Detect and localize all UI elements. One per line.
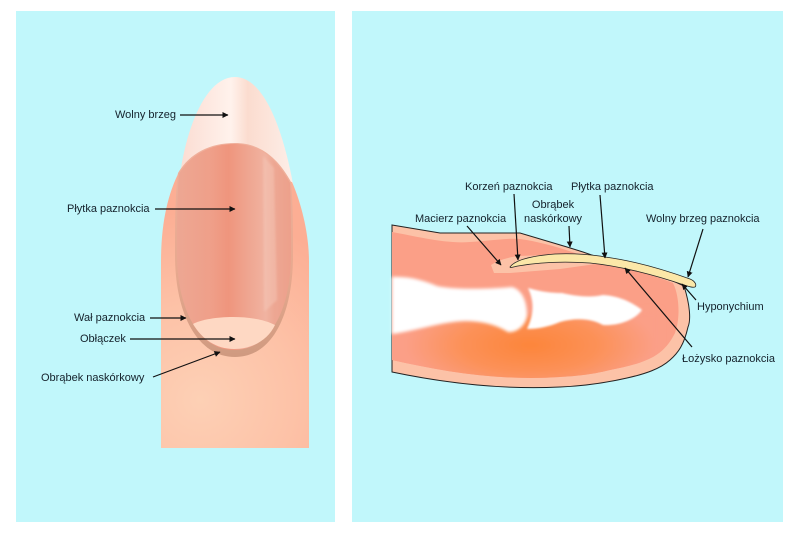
label: Wał paznokcia: Wał paznokcia xyxy=(74,312,146,324)
lunula xyxy=(193,317,275,349)
label: Obrąbek naskórkowy: Obrąbek xyxy=(532,199,575,211)
label: Płytka paznokcia: Płytka paznokcia xyxy=(67,203,150,215)
label: Hyponychium: Hyponychium xyxy=(697,301,764,313)
illustration: finger front view xyxy=(161,77,309,448)
label: Wolny brzeg: Wolny brzeg xyxy=(115,109,176,121)
label: Obrąbek naskórkowy xyxy=(524,199,583,247)
nail plate xyxy=(177,144,291,350)
label: Obrąbek naskórkowy: Obrąbek naskórkowy xyxy=(41,372,145,384)
panel: right background xyxy=(352,11,783,522)
label: Łożysko paznokcia xyxy=(625,268,776,365)
orange tissue glow xyxy=(392,314,644,378)
nail plate section xyxy=(510,254,696,287)
label: Macierz paznokcia: Macierz paznokcia xyxy=(415,213,507,225)
proximal bone xyxy=(392,277,527,334)
panel: left background xyxy=(16,11,335,522)
distal bone xyxy=(527,288,642,329)
label: Płytka paznokcia: Płytka paznokcia xyxy=(571,181,654,193)
label: Hyponychium xyxy=(682,284,764,313)
label: Łożysko paznokcia: Łożysko paznokcia xyxy=(682,353,776,365)
outer skin xyxy=(392,225,690,388)
nail matrix xyxy=(491,254,610,273)
label: Wolny brzeg xyxy=(115,109,228,121)
label: Korzeń paznokcia: Korzeń paznokcia xyxy=(465,181,553,193)
label: Obrąbek naskórkowy xyxy=(41,352,220,384)
free edge of nail xyxy=(180,77,293,190)
label: Korzeń paznokcia xyxy=(465,181,553,260)
nail highlight xyxy=(263,156,277,312)
finger xyxy=(161,170,309,448)
inner tissue xyxy=(392,232,678,378)
label: Macierz paznokcia xyxy=(415,213,507,265)
label: Wał paznokcia xyxy=(74,312,186,324)
illustration: finger cross-section xyxy=(385,225,696,388)
nail fold shadow xyxy=(175,143,293,357)
label: Obłączek: Obłączek xyxy=(80,333,126,345)
label: Wolny brzeg paznokcia: Wolny brzeg paznokcia xyxy=(646,213,760,225)
label: Obrąbek naskórkowy: naskórkowy xyxy=(524,213,583,225)
label: Wolny brzeg paznokcia xyxy=(646,213,760,277)
label: Płytka paznokcia xyxy=(571,181,654,258)
